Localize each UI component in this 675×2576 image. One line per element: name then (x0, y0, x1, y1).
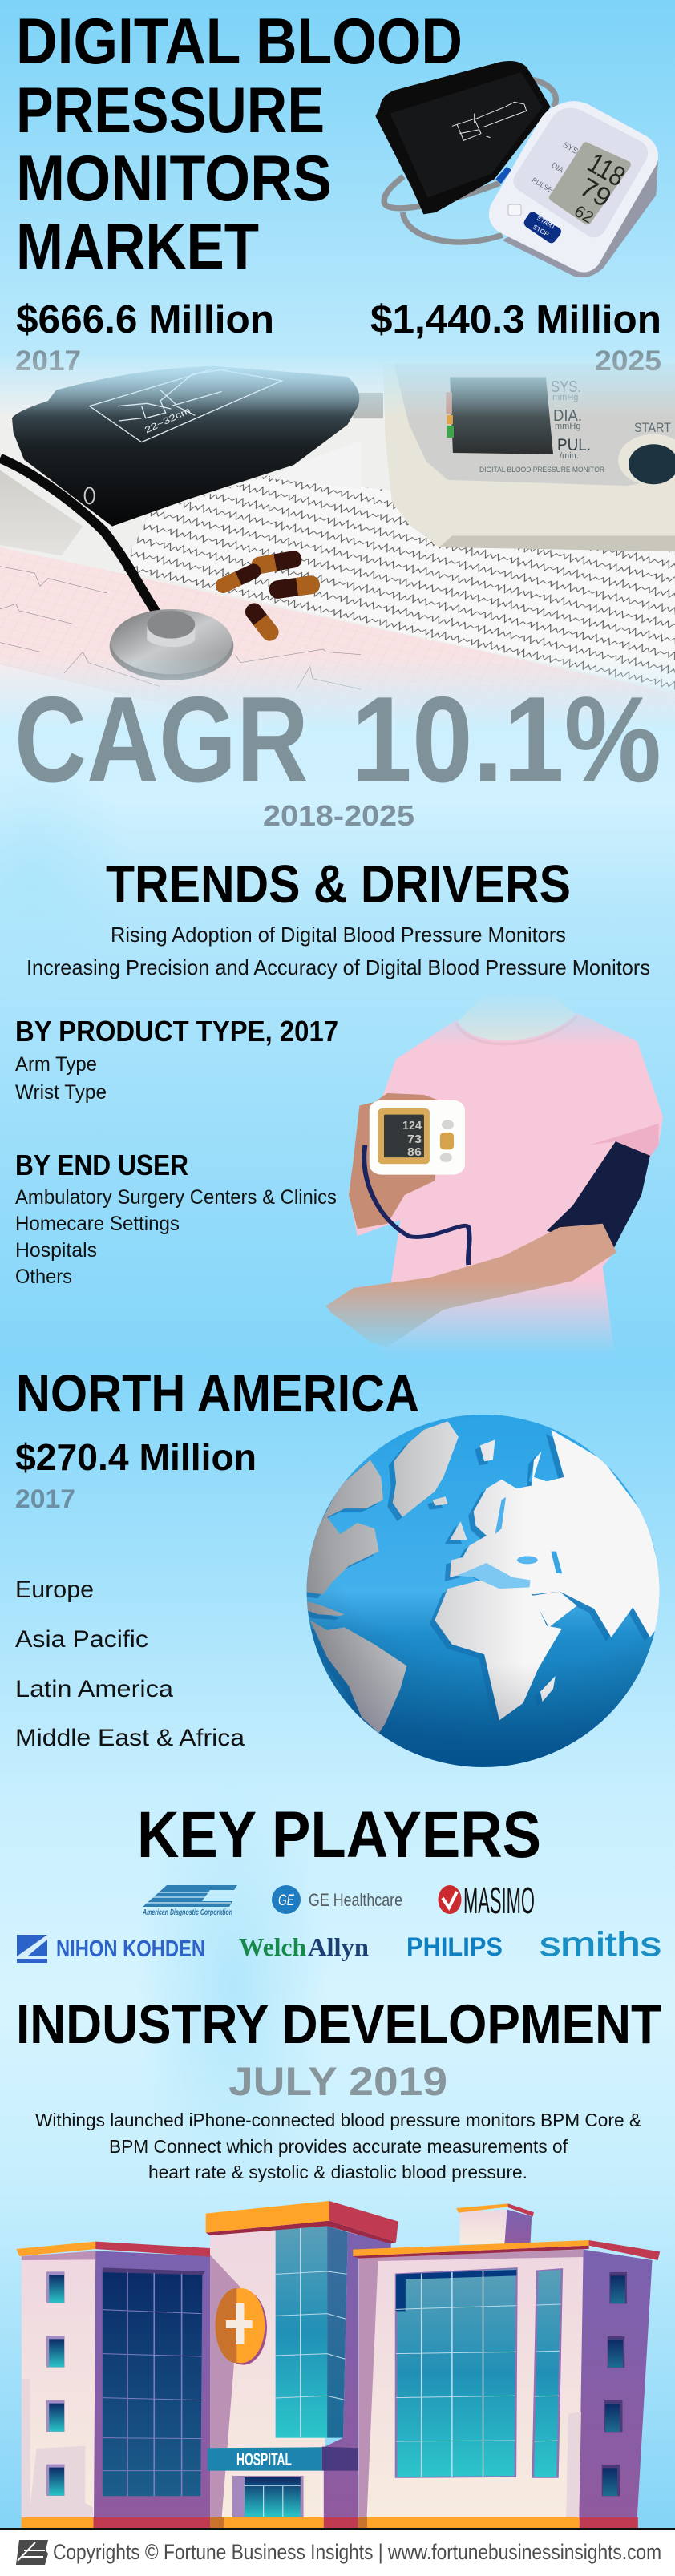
power symbol (508, 204, 521, 216)
development text: heart rate & systolic & diastolic blood pressure. (148, 2162, 527, 2182)
inland seas (517, 1556, 538, 1564)
logo: Masimo (438, 1880, 535, 1921)
globe (296, 1414, 667, 1769)
forearm and hand (326, 1224, 616, 1347)
ecg traces (0, 567, 361, 689)
logo: Welch Allyn: Welch (239, 1932, 306, 1961)
development text: Withings launched iPhone-connected blood pressure monitors BPM Core & (35, 2110, 641, 2130)
hospital illustration (16, 2201, 660, 2529)
eeg paper (121, 476, 675, 661)
title (16, 6, 463, 283)
monitor body (489, 101, 658, 273)
right windows (396, 2268, 516, 2477)
logo: Smiths: smiths (540, 1925, 661, 1963)
center tower (210, 2228, 325, 2518)
pills (213, 550, 321, 644)
logo: GE Healthcare: GE (278, 1892, 294, 1909)
segment: by end user: Others (15, 1266, 72, 1288)
logo: ADC (142, 1885, 237, 1917)
button labels (532, 215, 557, 238)
button labels: STOP (532, 224, 550, 238)
entrance (232, 2476, 304, 2517)
device digits: 86 (407, 1145, 422, 1159)
other regions: Latin America (15, 1676, 173, 1702)
segment: by end user: Homecare Settings (15, 1213, 180, 1235)
readings: 79 (575, 172, 616, 214)
device (370, 1100, 465, 1175)
start button (524, 212, 561, 243)
segment: by end user: Hospitals (15, 1239, 97, 1262)
photo: cuff, stethoscope, pills and ECG paper (0, 357, 675, 715)
device labels: DIGITAL BLOOD PRESSURE MONITOR (479, 466, 604, 474)
logo: Philips: PHILIPS (406, 1932, 503, 1961)
other regions: Middle East & Africa (15, 1725, 245, 1751)
device digits: 124 (402, 1119, 422, 1133)
device labels: SYS. (551, 378, 581, 396)
CAGR figure: CAGR (14, 672, 309, 808)
market value 2017 (15, 298, 274, 377)
title: MARKET (16, 211, 259, 283)
chimney block (460, 2210, 507, 2244)
segment: by end user: Ambulatory Surgery Centers & Clinics (15, 1186, 337, 1209)
readings (571, 147, 630, 227)
market value 2025: $1,440.3 Million (370, 298, 661, 341)
cuff arm pictogram (452, 102, 527, 140)
left wing (22, 2251, 95, 2518)
monitor (383, 364, 675, 551)
button labels: START (536, 215, 557, 231)
readings: 118 (582, 147, 630, 193)
cuff label (90, 369, 282, 442)
cuff (547, 1141, 650, 1253)
market value 2017: $666.6 Million (16, 298, 274, 341)
segment: by product type: BY PRODUCT TYPE, 2017 (15, 1015, 338, 1048)
neck (457, 999, 575, 1040)
logo: GE Healthcare (272, 1885, 402, 1914)
footer (0, 2528, 675, 2576)
trends text: Increasing Precision and Accuracy of Digital Blood Pressure Monitors (26, 955, 650, 979)
base band (22, 2517, 638, 2529)
left roof (16, 2242, 95, 2256)
heading: key players: KEY PLAYERS (137, 1799, 541, 1871)
development text: BPM Connect which provides accurate measurements of (109, 2136, 568, 2157)
inner panel (513, 108, 648, 237)
hero image: blood pressure monitor and cuff (375, 61, 658, 277)
title: DIGITAL BLOOD (16, 6, 463, 78)
market value 2025: 2025 (595, 345, 661, 377)
key labels: DIA (550, 161, 565, 175)
device labels: DIA. (553, 407, 582, 425)
stethoscope tube (0, 458, 158, 615)
right wing (358, 2250, 584, 2518)
readings: 62 (571, 202, 596, 227)
device digits (402, 1119, 422, 1159)
tube (364, 1145, 470, 1265)
shirt (349, 1012, 663, 1359)
title: MONITORS (16, 143, 332, 215)
key labels: PULSE (531, 176, 554, 194)
person using arm monitor (326, 991, 663, 1359)
trends text: Rising Adoption of Digital Blood Pressure Monitors (111, 923, 566, 947)
title: PRESSURE (16, 75, 325, 147)
device labels: mmHg (552, 393, 578, 402)
text: MASIMO (463, 1880, 535, 1921)
device digits: 73 (407, 1133, 422, 1146)
region: north america: $270.4 Million (15, 1436, 257, 1478)
region: north america: 2017 (15, 1484, 75, 1513)
segment: by product type: Arm Type (15, 1053, 97, 1076)
ecg paper (0, 665, 2, 666)
CAGR figure (14, 672, 661, 808)
other regions (15, 1577, 245, 1751)
development text (35, 2110, 641, 2182)
device labels: mmHg (555, 422, 580, 431)
key labels (531, 140, 580, 194)
other regions: Europe (15, 1577, 94, 1603)
photo: cuff, stethoscope, pills and ECG paper: 22~32cm (143, 406, 192, 435)
table shadow (0, 470, 83, 555)
cuff ring (85, 487, 95, 503)
market value 2025 (370, 298, 661, 377)
footer logo (16, 2540, 48, 2565)
small windows right (602, 2272, 627, 2496)
other regions: Asia Pacific (15, 1626, 148, 1653)
CAGR period: 2018-2025 (263, 799, 414, 832)
region: north america (15, 1363, 419, 1513)
monitor side (503, 160, 658, 277)
segment: by end user (15, 1149, 337, 1288)
segment: by end user: BY END USER (15, 1149, 188, 1181)
cuff (375, 61, 551, 214)
stethoscope chest piece (110, 609, 233, 680)
logo: Welch Allyn: Allyn (308, 1932, 369, 1961)
trends text (26, 923, 650, 979)
device labels (479, 378, 671, 474)
segment: by product type (15, 1015, 338, 1104)
development date: JULY 2019 (228, 2059, 447, 2104)
small windows left (46, 2271, 65, 2496)
key labels: SYS (561, 140, 580, 156)
logo: Welch Allyn (239, 1932, 369, 1961)
holding hand (349, 1093, 443, 1229)
device labels: /min. (560, 451, 579, 461)
lcd (549, 142, 631, 224)
banner (208, 2447, 322, 2471)
logo: Nihon Kohden (17, 1935, 205, 1963)
hose (384, 79, 556, 242)
segment: by product type: Wrist Type (15, 1081, 107, 1104)
market value 2017: 2017 (15, 345, 81, 377)
logo: ADC: American Diagnostic Corporation (142, 1908, 232, 1917)
logo: Nihon Kohden: NIHON KOHDEN (56, 1936, 205, 1962)
hospital illustration: HOSPITAL (236, 2449, 292, 2469)
region: north america: NORTH AMERICA (16, 1363, 419, 1423)
device labels: PUL. (557, 436, 591, 454)
hose connector (495, 167, 511, 184)
heading: trends and drivers: TRENDS & DRIVERS (106, 854, 571, 915)
cuff (12, 366, 359, 527)
cross sign (220, 2290, 267, 2365)
logo: GE Healthcare: GE Healthcare (309, 1890, 402, 1910)
